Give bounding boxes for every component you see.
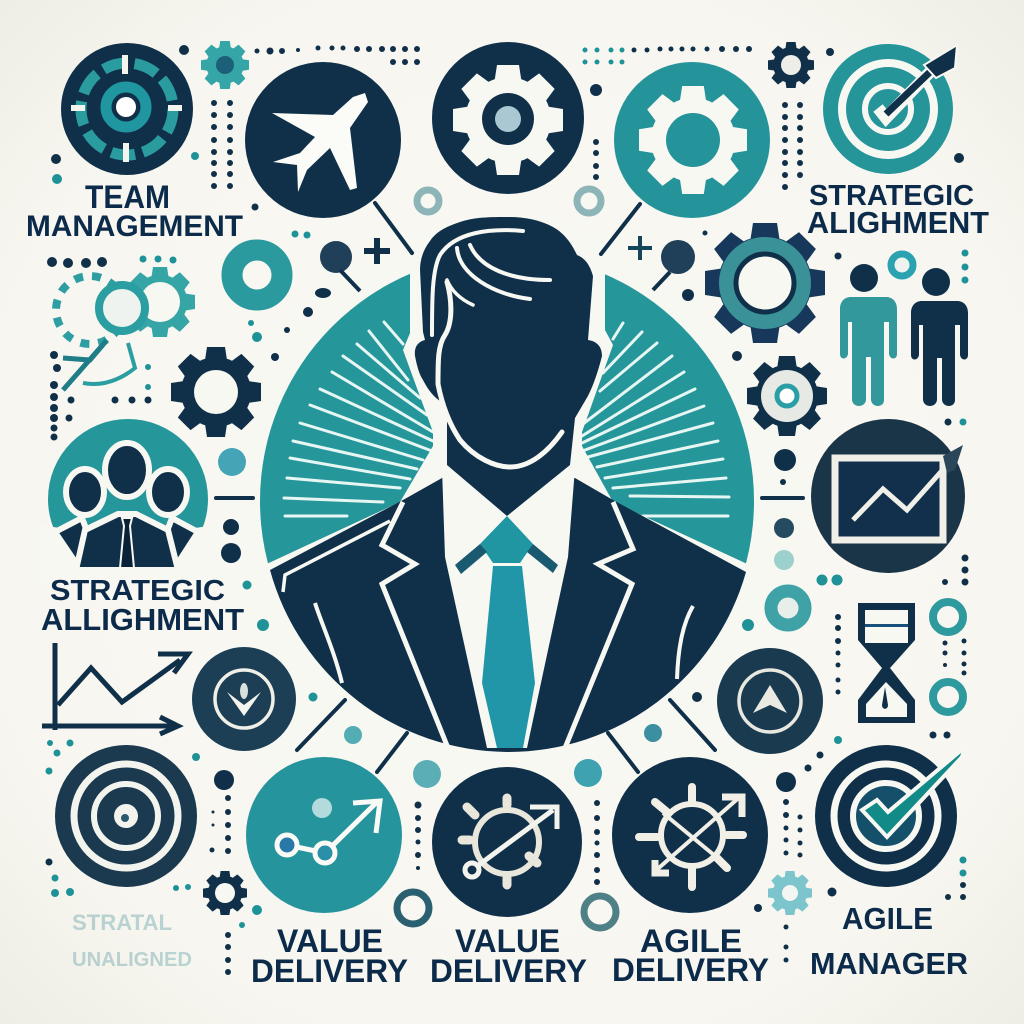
lapel lines [283,502,693,748]
label: strategic alignment right: STRATEGIC [809,180,974,212]
label: team management: TEAM [85,179,170,215]
icon: gear with arrow [432,767,582,917]
label: strategic alignment right [807,180,989,240]
icon: hourglass [858,603,915,723]
tie [455,516,558,748]
label: team management: MANAGEMENT [26,210,243,243]
central businessman silhouette [270,217,746,752]
hair and face lines [432,230,562,467]
icon: linked teal gears [56,267,195,390]
label: value delivery 1: DELIVERY [251,953,408,989]
icon: teal growth [246,757,402,913]
icon: target crosshair [61,43,193,175]
icon: small teal gear [201,41,249,89]
head and neck [415,217,602,516]
icon: bottom small gears [203,871,812,915]
icon: navy and teal gear ring [705,223,825,343]
icon: small gear right [747,356,827,436]
label: team management [26,179,243,243]
label: strategic alignment left: STRATEGIC [50,575,225,607]
label: agile manager: AGILE [842,901,933,936]
icon: navy gear left [171,347,261,437]
small node icons [218,189,963,928]
label: value delivery 2 [430,923,587,989]
shirt [442,468,575,748]
icon: two people [840,254,968,406]
label: strategic alignment left [41,575,244,637]
label: agile manager [810,901,968,981]
icon: target and arrow [823,44,957,174]
label: agile delivery: DELIVERY [612,952,769,988]
icon: compass cross [612,757,768,913]
icon: shield badge [192,647,296,751]
icon: team of people [40,419,216,585]
label: agile manager: MANAGER [810,946,968,981]
label: strategic alignment left: ALLIGHMENT [41,602,244,637]
central teal sunburst circle [258,240,760,770]
label: agile delivery: AGILE [640,923,742,959]
label: value delivery 1 [251,923,408,989]
label: value delivery 1: VALUE [277,923,383,959]
faded label: STRATAL [72,910,172,935]
faded label: UNALIGNED [72,949,192,971]
icon: check target [815,745,965,887]
icon: airplane [245,62,401,218]
connector lines [216,203,803,772]
icon: white gear [432,42,584,194]
icon: line chart left [42,643,188,734]
label: value delivery 2: DELIVERY [430,953,587,989]
teal dots [44,48,968,928]
label: strategic alignment right: ALIGHMENT [807,205,989,240]
icon: triangle badge [717,648,823,754]
icon: teal gear [614,62,770,218]
icon: concentric target [55,745,197,887]
jacket [270,478,746,752]
faded label [72,910,192,971]
icon: small navy gear [768,42,814,88]
label: agile delivery [612,923,769,988]
label: value delivery 2: VALUE [455,923,560,959]
icon: presentation chart [811,419,965,573]
